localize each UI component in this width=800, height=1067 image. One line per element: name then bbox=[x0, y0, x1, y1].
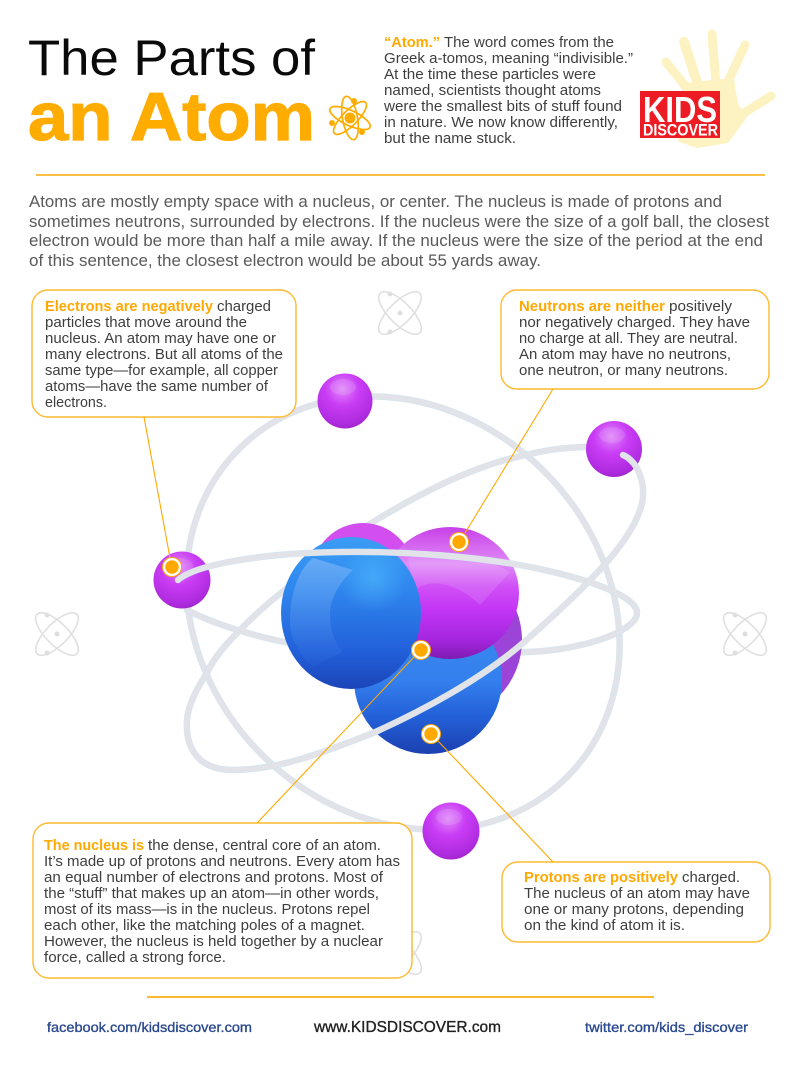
callout: nucleus: an equal number of electrons and protons. Most of bbox=[44, 869, 384, 886]
callout: electrons: nucleus. An atom may have one or bbox=[45, 330, 276, 347]
callout: nucleus: It’s made up of protons and neutrons. Every atom has bbox=[44, 853, 400, 870]
marker: electrons bbox=[162, 557, 182, 577]
nucleus bbox=[281, 523, 522, 754]
callout: nucleus: force, called a strong force. bbox=[44, 949, 226, 966]
callout: electrons: particles that move around the bbox=[45, 314, 247, 331]
text block: atom word origin: “Atom.” bbox=[384, 34, 440, 51]
decorative atom: right bbox=[717, 606, 773, 662]
leader line: protons bbox=[438, 741, 553, 862]
marker: neutrons bbox=[449, 532, 469, 552]
footer links: www.KIDSDISCOVER.com bbox=[313, 1019, 501, 1036]
lower purple proton bbox=[362, 560, 522, 720]
callout: protons: Protons are positively bbox=[524, 869, 679, 886]
callout: protons: The nucleus of an atom may have bbox=[524, 885, 750, 902]
text block: atom word origin: named, scientists thought atoms bbox=[384, 82, 601, 99]
text block: atom word origin: At the time these particles were bbox=[384, 66, 596, 83]
callout: electrons: same type—for example, all copper bbox=[45, 362, 278, 379]
large neutron bbox=[281, 537, 421, 689]
logo: Kids Discover bbox=[640, 34, 771, 146]
callout: neutrons: no charge at all. They are neutral. bbox=[519, 330, 738, 347]
logo: Kids Discover: DISCOVER bbox=[643, 122, 718, 140]
leader line: electrons bbox=[144, 417, 170, 558]
callout: protons: one or many protons, depending bbox=[524, 901, 744, 918]
text block: atom word origin: The word comes from the bbox=[444, 34, 614, 51]
title bbox=[28, 30, 315, 155]
callout: electrons: charged bbox=[217, 298, 271, 315]
intro paragraph bbox=[29, 193, 769, 270]
text block: atom word origin: in nature. We now know differently, bbox=[384, 114, 618, 131]
orbit: large ring bbox=[98, 308, 708, 918]
intro paragraph: Atoms are mostly empty space with a nucleus, or center. The nucleus is made of protons and bbox=[29, 193, 722, 211]
callout: nucleus: the dense, central core of an atom. bbox=[148, 837, 381, 854]
callout: electrons bbox=[32, 290, 296, 417]
upper proton bbox=[381, 527, 519, 659]
callout: protons: on the kind of atom it is. bbox=[524, 917, 685, 934]
callout: protons: charged. bbox=[682, 869, 740, 886]
leader line: neutrons bbox=[465, 389, 553, 533]
electron: top bbox=[318, 374, 372, 428]
orbit: left and right balls bbox=[154, 421, 642, 608]
footer links bbox=[47, 1019, 748, 1036]
icon: orange atom bbox=[327, 95, 373, 141]
callout: nucleus: The nucleus is bbox=[44, 837, 144, 854]
text block: atom word origin: were the smallest bits of stuff found bbox=[383, 98, 622, 115]
text block: atom word origin: but the name stuck. bbox=[384, 130, 516, 147]
callout: nucleus: However, the nucleus is held together by a nuclear bbox=[44, 933, 383, 950]
callout: electrons: electrons. bbox=[45, 394, 107, 411]
title: The Parts of bbox=[28, 30, 315, 86]
atom illustration bbox=[98, 308, 708, 918]
decorative atom: bottom bbox=[372, 925, 428, 981]
callout: electrons: many electrons. But all atoms of the bbox=[45, 346, 283, 363]
leader line: nucleus bbox=[257, 656, 415, 823]
callout: neutrons: one neutron, or many neutrons. bbox=[519, 362, 728, 379]
lower neutron bbox=[354, 606, 502, 754]
icon: hand print bbox=[666, 34, 771, 146]
callout: neutrons: positively bbox=[669, 298, 732, 315]
text block: atom word origin bbox=[383, 34, 633, 147]
footer links: facebook.com/kidsdiscover.com bbox=[47, 1019, 252, 1035]
intro paragraph: electron would be more than half a mile away. If the nucleus were the size of the period at the end bbox=[29, 232, 763, 250]
orbits: back segments bbox=[187, 447, 637, 673]
text block: atom word origin: Greek a-tomos, meaning “indivisible.” bbox=[384, 50, 633, 67]
title: an Atom bbox=[28, 79, 315, 155]
electron: bottom bbox=[422, 802, 480, 860]
callout: nucleus: each other, like the matching poles of a magnet. bbox=[44, 917, 365, 934]
callout: protons bbox=[502, 862, 770, 942]
footer links: twitter.com/kids_discover bbox=[585, 1019, 748, 1035]
decorative atom: top bbox=[372, 285, 428, 341]
callout: electrons: Electrons are negatively bbox=[45, 298, 214, 315]
callout: neutrons: An atom may have no neutrons, bbox=[519, 346, 731, 363]
decorative atom: left bbox=[29, 606, 85, 662]
callout: nucleus bbox=[33, 823, 412, 978]
callout: electrons: atoms—have the same number of bbox=[45, 378, 269, 395]
back proton bbox=[312, 523, 414, 625]
callout: neutrons: Neutrons are neither bbox=[519, 298, 665, 315]
intro paragraph: sometimes neutrons, surrounded by electrons. If the nucleus were the size of a golf ball, the closest bbox=[29, 213, 769, 231]
callout: nucleus: most of its mass—is in the nucleus. Protons repel bbox=[44, 901, 370, 918]
intro paragraph: of this sentence, the closest electron would be about 55 yards away. bbox=[29, 252, 541, 270]
logo: Kids Discover: KIDS bbox=[643, 89, 717, 130]
callout: neutrons bbox=[501, 290, 769, 389]
callout: neutrons: nor negatively charged. They have bbox=[519, 314, 750, 331]
marker: protons bbox=[421, 724, 441, 744]
marker: nucleus bbox=[411, 640, 431, 660]
orbits: front segments bbox=[178, 455, 643, 770]
callout: nucleus: the “stuff” that makes up an atom—in other words, bbox=[44, 885, 379, 902]
